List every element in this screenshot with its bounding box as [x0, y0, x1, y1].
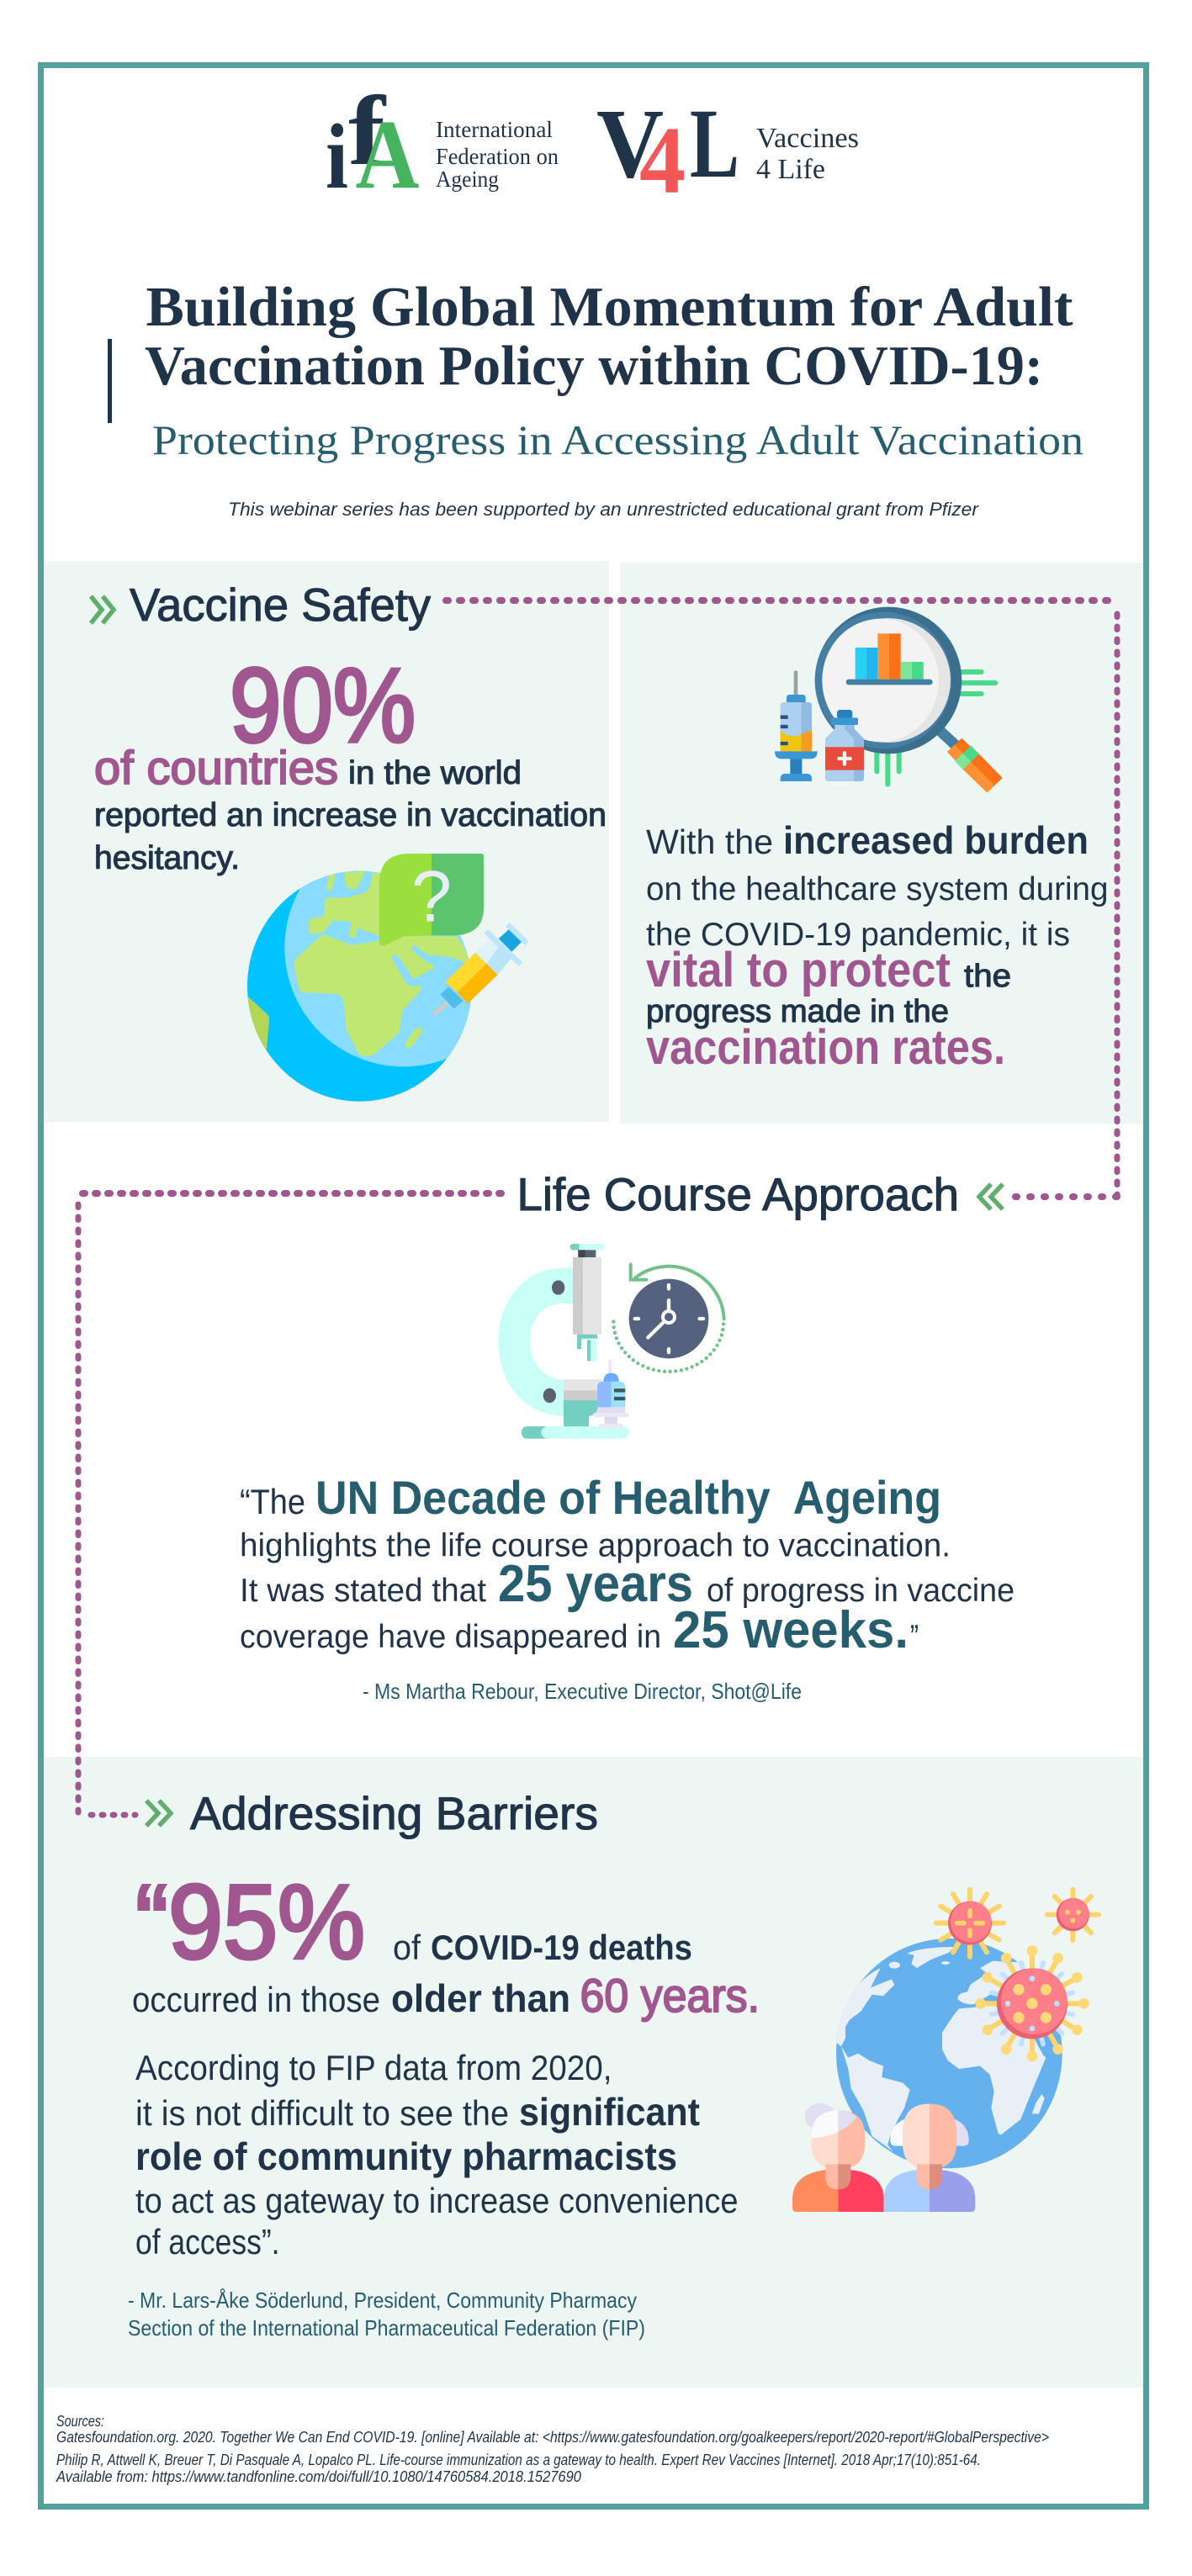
sponsorship note: This webinar series has been supported by an unrestricted educational grant from Pfizer — [228, 499, 980, 520]
text block: 95 percent of deaths: COVID-19 deaths — [431, 1928, 692, 1967]
quote: UN Decade of Healthy Ageing: 25 years — [498, 1555, 693, 1613]
logo: Vaccines 4 Life: L — [690, 88, 739, 198]
icon: magnifier with chart and vaccine — [775, 607, 1003, 792]
quote: UN Decade of Healthy Ageing: coverage have disappeared in — [240, 1619, 661, 1655]
text block: 95 percent of deaths: 60 years. — [580, 1969, 760, 2022]
text block: 95 percent of deaths — [132, 1864, 760, 2022]
quote: UN Decade of Healthy Ageing: 25 weeks. — [673, 1601, 909, 1659]
title accent bar — [108, 339, 112, 423]
text block: community pharmacists: significant — [519, 2090, 700, 2134]
quote: UN Decade of Healthy Ageing — [240, 1471, 1015, 1659]
icon: globe with question bubble and syringe: ? — [411, 856, 452, 937]
quote: UN Decade of Healthy Ageing: “The — [240, 1482, 305, 1521]
dotted connector: life course to addressing barriers — [78, 1193, 501, 1815]
text block: community pharmacists: to act as gateway to increase convenience — [135, 2181, 739, 2220]
background panel: addressing barriers — [44, 1757, 1143, 2388]
text block: increased burden: vital to protect — [646, 943, 951, 997]
title — [145, 276, 1073, 397]
logo: International Federation on Ageing: i — [326, 105, 348, 208]
quote: UN Decade of Healthy Ageing: ” — [910, 1619, 919, 1655]
sources: Sources: — [56, 2413, 104, 2430]
icon: chevrons — [979, 1184, 1003, 1209]
logo: International Federation on Ageing: Ageing — [436, 167, 499, 192]
text block: community pharmacists — [135, 2048, 739, 2261]
attribution: Lars-Åke Söderlund: - Mr. Lars-Åke Söderlund, President, Community Pharmacy — [128, 2288, 637, 2313]
text block: increased burden: progress made in the — [646, 994, 949, 1029]
sources — [56, 2413, 1049, 2485]
logo: Vaccines 4 Life — [596, 88, 859, 214]
icon: microscope with syringe and clock — [498, 1244, 724, 1439]
text block: 90 percent of countries: reported an increase in vaccination — [94, 797, 607, 833]
text block: 95 percent of deaths: older than — [391, 1976, 570, 2020]
text block: community pharmacists: According to FIP data from 2020, — [135, 2048, 612, 2087]
dotted connector: vaccine safety to life course — [446, 600, 1117, 1201]
logo: Vaccines 4 Life: 4 — [639, 107, 686, 214]
attribution: Lars-Åke Söderlund: Section of the International Pharmaceutical Federation (FIP) — [128, 2315, 645, 2341]
logo: Vaccines 4 Life: 4 Life — [756, 154, 825, 185]
sources: Gatesfoundation.org. 2020. Together We Can End COVID-19. [online] Available at: <https://www.gatesfoundation.org/goalkeepers/report/2020-report/#GlobalPerspective> — [56, 2429, 1049, 2446]
sources: Available from: https://www.tandfonline.com/doi/full/10.1080/14760584.2018.1527690 — [56, 2468, 581, 2485]
text block: 95 percent of deaths: of — [393, 1928, 421, 1967]
text block: 90 percent of countries — [94, 648, 607, 876]
logo: International Federation on Ageing: International — [436, 117, 553, 142]
text block: increased burden: on the healthcare system during — [646, 871, 1109, 907]
text block: community pharmacists: it is not difficult to see the — [135, 2093, 509, 2133]
text block: 90 percent of countries: hesitancy. — [94, 840, 240, 876]
logo: International Federation on Ageing: A — [355, 99, 419, 209]
heading: Addressing Barriers: Addressing Barriers — [190, 1787, 598, 1839]
logo: International Federation on Ageing: f — [348, 76, 387, 186]
text block: 90 percent of countries: of countries — [94, 741, 338, 794]
attribution: Martha Rebour: - Ms Martha Rebour, Executive Director, Shot@Life — [363, 1679, 802, 1704]
text block: 90 percent of countries: 90% — [230, 648, 416, 764]
heading: Life Course Approach: Life Course Approach — [517, 1168, 959, 1220]
text block: increased burden: increased burden — [783, 818, 1089, 862]
icon: chevrons — [146, 1801, 171, 1826]
text block: increased burden: the — [964, 959, 1011, 994]
background panel: vaccine safety right — [621, 563, 1143, 1124]
logo: Vaccines 4 Life: V — [596, 88, 664, 198]
title: Vaccination Policy within COVID-19: — [145, 335, 1043, 397]
text block: community pharmacists: role of community pharmacists — [135, 2134, 677, 2178]
text block: 95 percent of deaths: “95% — [135, 1864, 365, 1981]
subtitle: Protecting Progress in Accessing Adult Vaccination — [152, 416, 1083, 463]
title: Building Global Momentum for Adult — [146, 276, 1073, 338]
text block: increased burden: the COVID-19 pandemic, it is — [646, 917, 1070, 953]
icon: chevrons — [91, 596, 114, 623]
text block: 95 percent of deaths: occurred in those — [132, 1980, 380, 2019]
text block: increased burden: vaccination rates. — [646, 1020, 1005, 1075]
quote: UN Decade of Healthy Ageing: UN Decade of Healthy Ageing — [315, 1471, 941, 1524]
text block: 90 percent of countries: in the world — [348, 755, 522, 791]
quote: UN Decade of Healthy Ageing: of progress in vaccine — [707, 1573, 1015, 1609]
logo: Vaccines 4 Life: Vaccines — [756, 123, 859, 154]
background panel: vaccine safety left — [44, 561, 609, 1122]
text block: community pharmacists: of access”. — [135, 2222, 279, 2261]
logo: International Federation on Ageing: Federation on — [436, 144, 559, 169]
icon: globe with question bubble and syringe — [244, 828, 527, 1102]
text block: increased burden — [646, 818, 1109, 1075]
quote: UN Decade of Healthy Ageing: highlights the life course approach to vaccination. — [240, 1527, 951, 1564]
logo: International Federation on Ageing — [326, 76, 559, 209]
text block: increased burden: With the — [646, 823, 773, 861]
attribution: Lars-Åke Söderlund — [128, 2288, 645, 2341]
heading: Vaccine Safety: Vaccine Safety — [130, 579, 431, 631]
icon: globe with viruses and older people — [792, 1890, 1099, 2212]
sources: Philip R, Attwell K, Breuer T, Di Pasquale A, Lopalco PL. Life-course immunization as a gateway to health. Expert Rev Vaccines [Internet]. 2018 Apr;17(10):851-64. — [56, 2452, 981, 2468]
quote: UN Decade of Healthy Ageing: It was stated that — [240, 1573, 486, 1609]
